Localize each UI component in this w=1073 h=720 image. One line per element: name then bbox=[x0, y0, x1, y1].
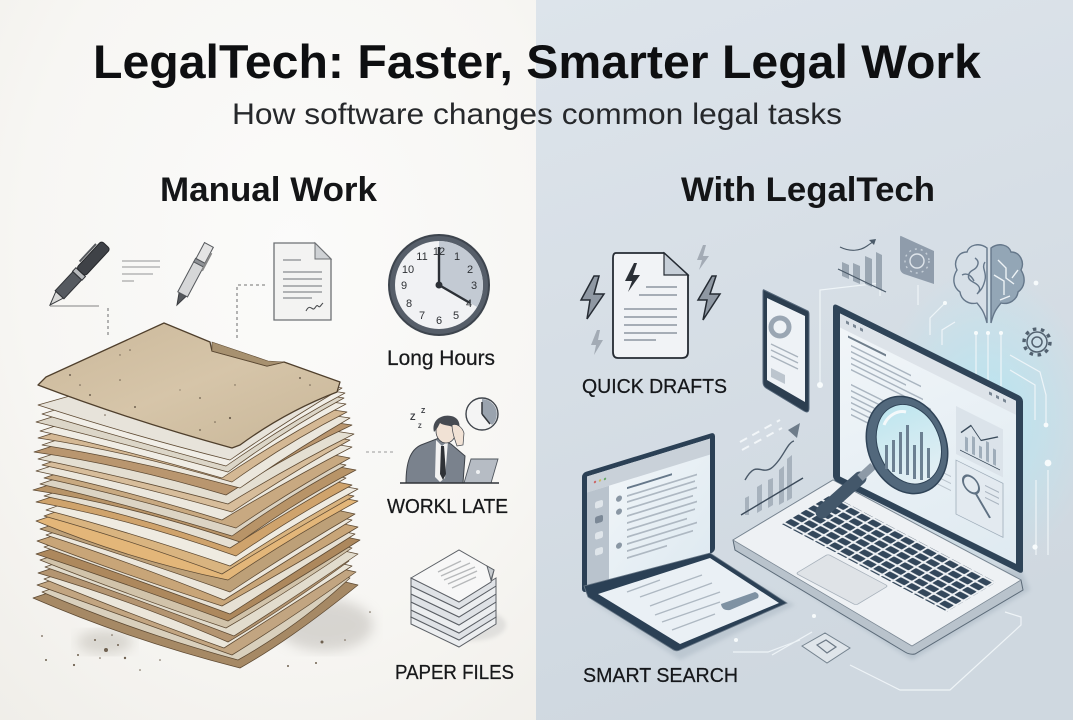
laptop bbox=[733, 303, 1030, 660]
icon: wall clock bbox=[389, 235, 489, 335]
tablet lower panel bbox=[584, 553, 787, 651]
top folder bbox=[38, 323, 340, 448]
laptop glow bbox=[875, 270, 1073, 570]
heading: with legaltech: With LegalTech bbox=[681, 171, 935, 209]
icon: wall clock: 2 bbox=[467, 264, 473, 276]
circuit lines bbox=[733, 283, 1048, 690]
icon: wall clock: 3 bbox=[471, 280, 477, 292]
tablet shadow bbox=[590, 560, 795, 660]
icon: small paper stack bbox=[411, 550, 506, 647]
icon: left bolt bbox=[581, 276, 604, 319]
laptop keyboard bbox=[745, 495, 996, 634]
left panel background bbox=[0, 0, 536, 720]
icon: wall clock: 6 bbox=[436, 315, 442, 327]
icon: tired worker at laptop bbox=[400, 398, 499, 483]
tablet bbox=[582, 432, 795, 660]
icon: wall clock: 1 bbox=[454, 251, 460, 263]
label: work late: WORKL LATE bbox=[387, 496, 508, 518]
icon: tired worker at laptop: Z bbox=[421, 408, 426, 415]
dust haze bbox=[77, 630, 133, 654]
icon: wall clock: 7 bbox=[419, 310, 425, 322]
icon: dark pen with note lines bbox=[44, 240, 160, 309]
icon: small gear bbox=[1024, 329, 1050, 355]
icon: wall clock: 12 bbox=[433, 246, 445, 258]
circuit nodes bbox=[734, 281, 1051, 642]
label: quick drafts: QUICK DRAFTS bbox=[582, 376, 727, 398]
icon: wall clock: 9 bbox=[401, 280, 407, 292]
icon: faint bolt top bbox=[697, 245, 709, 270]
icon: diamond chip bbox=[802, 633, 850, 663]
icon: wall clock: 5 bbox=[453, 310, 459, 322]
label: smart search: SMART SEARCH bbox=[583, 665, 738, 687]
chart: rising bars centre bbox=[740, 420, 803, 515]
connector: document to stack bbox=[237, 285, 266, 338]
magnifying glass bbox=[822, 384, 962, 512]
connector: pen to stack bbox=[107, 308, 109, 338]
connector: stack to late worker bbox=[366, 451, 396, 453]
icon: brain bbox=[954, 245, 1024, 323]
laptop screen bbox=[833, 303, 1023, 574]
dust specks on folder and floor bbox=[41, 349, 371, 671]
label: paper files: PAPER FILES bbox=[395, 662, 514, 684]
icon: right bolt bbox=[698, 276, 720, 320]
icon: tired worker at laptop: Z bbox=[410, 412, 416, 422]
icon: signed document bbox=[274, 243, 331, 320]
icon: tired worker at laptop: Z bbox=[418, 424, 422, 430]
icon: document with lightning bolts bbox=[613, 253, 688, 358]
folder tab recess bbox=[212, 342, 284, 366]
chart: top bars bbox=[838, 239, 886, 292]
laptop base bbox=[733, 480, 1023, 654]
pile shadow bbox=[277, 599, 373, 651]
icon: gear chip bbox=[900, 236, 934, 284]
icon: wall clock: 4 bbox=[466, 298, 472, 310]
illustration: large pile of folders bbox=[33, 323, 373, 668]
icon: phone bbox=[763, 290, 809, 412]
label: long hours: Long Hours bbox=[387, 347, 495, 370]
laptop shadow bbox=[740, 550, 1030, 660]
icon: wall clock: 10 bbox=[402, 264, 414, 276]
icon: faint bolt bottom bbox=[591, 330, 603, 355]
heading: manual work: Manual Work bbox=[160, 171, 377, 209]
icon: wall clock: 8 bbox=[406, 298, 412, 310]
right panel background bbox=[536, 0, 1073, 720]
icon: wall clock: 11 bbox=[416, 251, 428, 263]
subtitle: How software changes common legal tasks bbox=[232, 98, 842, 131]
icon: light pen bbox=[172, 242, 215, 308]
tablet screen bbox=[582, 432, 715, 593]
title: LegalTech: Faster, Smarter Legal Work bbox=[93, 35, 982, 88]
